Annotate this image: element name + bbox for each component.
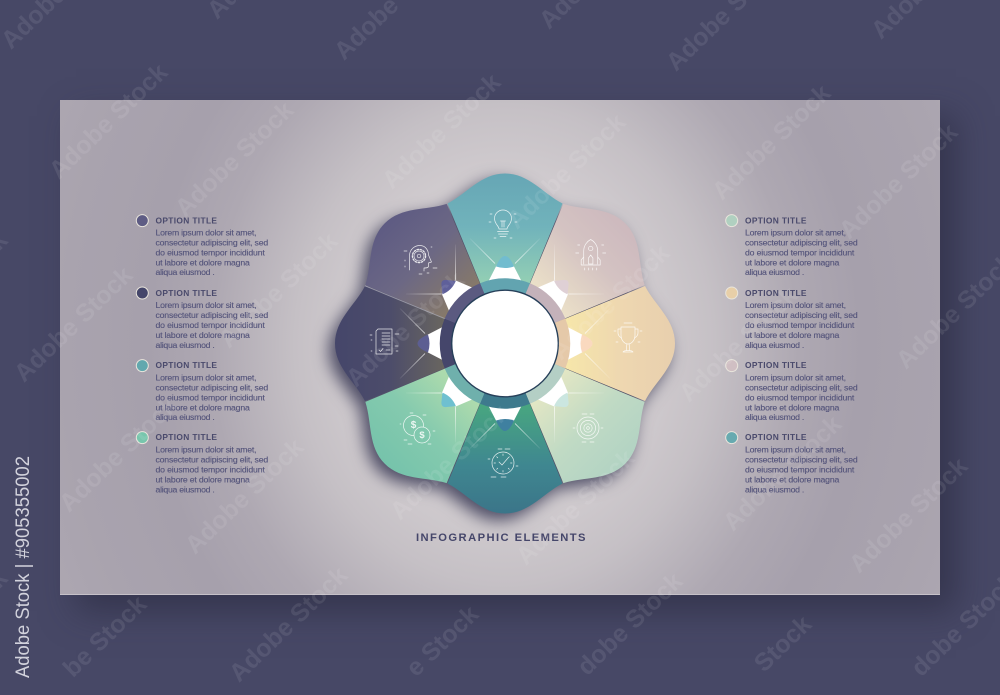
option: left 4: OPTION TITLE	[156, 432, 217, 442]
option: left 3: ut labore et dolore magna	[156, 402, 250, 412]
option: left 2	[136, 287, 268, 350]
option: left 1: Lorem ipsum dolor sit amet,	[156, 227, 256, 237]
option: left 4: consectetur adipiscing elit, sed	[156, 455, 268, 465]
watermark pattern: Stock	[749, 610, 817, 678]
watermark pattern: Adobe Stock	[224, 561, 353, 687]
watermark pattern: Adobe Stock	[707, 79, 836, 205]
option: left 3	[136, 360, 268, 422]
option: right 3: Lorem ipsum dolor sit amet,	[745, 372, 846, 382]
icon: head with gear	[404, 246, 437, 274]
option: right 1: do eiusmod tempor incididunt	[745, 247, 855, 257]
option: right 4: Lorem ipsum dolor sit amet,	[745, 445, 846, 455]
segment: upper left wedge	[344, 183, 546, 384]
option: left 4: aliqua eiusmod .	[156, 485, 215, 495]
segment: lower right wedge	[464, 303, 666, 504]
option: right 2: consectetur adipiscing elit, sed	[745, 310, 858, 320]
title: infographic elements: INFOGRAPHIC ELEMENTS	[416, 532, 586, 544]
option: left 2: Lorem ipsum dolor sit amet,	[156, 300, 256, 310]
spike: upper right	[524, 245, 604, 324]
option: right 2: ut labore et dolore magna	[745, 330, 839, 340]
centre white circle	[452, 290, 558, 397]
spike: lower left	[406, 363, 486, 442]
option: left 4: Lorem ipsum dolor sit amet,	[156, 445, 256, 455]
option: right 4: do eiusmod tempor incididunt	[745, 465, 855, 475]
watermark pattern: Adobe Stock	[9, 261, 138, 387]
option: left 3: do eiusmod tempor incididunt	[156, 392, 265, 402]
option: left 2: OPTION TITLE	[156, 288, 217, 298]
watermark pattern: Adobe Stock	[718, 410, 847, 536]
option: left 3: aliqua eiusmod .	[156, 412, 215, 422]
watermark pattern: be Stock	[58, 590, 152, 683]
segment: top wedge	[448, 174, 562, 344]
option: right 4: consectetur adipiscing elit, sed	[745, 455, 858, 465]
option: right 2: Lorem ipsum dolor sit amet,	[745, 300, 846, 310]
option: left 2: do eiusmod tempor incididunt	[156, 320, 265, 330]
option: right 1: ut labore et dolore magna	[745, 257, 839, 267]
option: right 3: do eiusmod tempor incididunt	[745, 392, 855, 402]
spike: bottom	[470, 406, 540, 448]
watermark pattern: dobe Stock	[572, 567, 688, 681]
option: left 1: do eiusmod tempor incididunt	[156, 247, 265, 257]
coloured ring	[446, 284, 564, 403]
spike: lower right	[524, 363, 604, 442]
option: left 1: aliqua eiusmod .	[156, 267, 215, 277]
watermark pattern: Adobe Stock	[377, 68, 506, 194]
watermark pattern: Adobe Stock	[834, 118, 963, 244]
option: right 2: do eiusmod tempor incididunt	[745, 320, 855, 330]
option: right 1: Lorem ipsum dolor sit amet,	[745, 227, 846, 237]
watermark pattern: Adobe Stock	[844, 452, 973, 578]
white spikes, rays and coloured tips	[400, 238, 610, 448]
option: right 3: aliqua eiusmod .	[745, 412, 804, 422]
option: left 4	[136, 432, 268, 495]
watermark pattern: Adobe Stock	[214, 227, 343, 353]
panel: background card	[60, 100, 940, 595]
icon: coins	[400, 413, 435, 444]
segment: bottom wedge	[448, 344, 562, 514]
option: left 1: consectetur adipiscing elit, sed	[156, 238, 268, 248]
watermark pattern: Adobe Stock	[502, 108, 631, 234]
icon: trophy	[614, 323, 642, 352]
option: right 2: OPTION TITLE	[745, 288, 807, 298]
option: left 2: aliqua eiusmod .	[156, 340, 215, 350]
option: left 2: ut labore et dolore magna	[156, 330, 250, 340]
segment: right wedge	[505, 286, 675, 401]
icon: clock	[488, 449, 518, 477]
option: left 3: OPTION TITLE	[156, 360, 217, 370]
option: right 4	[726, 432, 858, 495]
option: right 3: OPTION TITLE	[745, 360, 807, 370]
spike: top	[470, 238, 540, 282]
option: left 1	[136, 215, 268, 277]
option: left 2: consectetur adipiscing elit, sed	[156, 310, 268, 320]
icon: coins: $	[411, 420, 417, 431]
icon: rocket	[576, 240, 606, 270]
option: left 1: OPTION TITLE	[156, 216, 217, 226]
option: right 4: OPTION TITLE	[745, 432, 807, 442]
icon: target	[573, 414, 603, 442]
watermark pattern: Adobe Stock	[170, 96, 299, 222]
watermark pattern: e Stock	[401, 600, 484, 682]
watermark pattern: Adobe Stock	[44, 58, 173, 184]
watermark pattern: Adobe Stock	[674, 281, 803, 407]
icon: coins: $	[419, 430, 425, 441]
stock id side label: Adobe Stock | #905355002	[12, 456, 34, 678]
option: right 1: consectetur adipiscing elit, sed	[745, 238, 858, 248]
segment: left wedge	[335, 286, 505, 401]
watermark pattern: Adobe Stock	[546, 239, 675, 365]
icon: document	[370, 329, 399, 354]
option: right 2	[726, 287, 858, 350]
watermark pattern: Adobe Stock	[180, 433, 309, 559]
watermark pattern: Adobe Stock	[385, 399, 514, 525]
option: left 3: Lorem ipsum dolor sit amet,	[156, 372, 256, 382]
option: left 1: ut labore et dolore magna	[156, 257, 250, 267]
wheel diagram	[335, 174, 675, 514]
option: right 4: aliqua eiusmod .	[745, 485, 804, 495]
spike: right	[567, 308, 610, 378]
option: right 2: aliqua eiusmod .	[745, 340, 804, 350]
option: left 3: consectetur adipiscing elit, sed	[156, 383, 268, 393]
icon: light bulb	[489, 210, 517, 238]
option: right 1: OPTION TITLE	[745, 216, 807, 226]
watermark pattern: Adobe Stock	[511, 444, 640, 570]
spike: upper left	[406, 245, 486, 324]
option: left 4: ut labore et dolore magna	[156, 475, 250, 485]
option: right 3: consectetur adipiscing elit, sed	[745, 383, 858, 393]
option: right 1	[726, 215, 858, 277]
watermark pattern: Adobe Stock	[341, 266, 470, 392]
segment: lower left wedge	[344, 303, 546, 504]
option: right 3	[726, 360, 858, 422]
watermark pattern: Adobe Stock	[54, 391, 183, 517]
option: right 1: aliqua eiusmod .	[745, 267, 804, 277]
segment: upper right wedge	[464, 183, 666, 384]
wheel segments with shadow	[335, 174, 675, 514]
option: left 4: do eiusmod tempor incididunt	[156, 465, 265, 475]
option: right 3: ut labore et dolore magna	[745, 402, 839, 412]
option: right 4: ut labore et dolore magna	[745, 475, 839, 485]
spike: left	[400, 308, 443, 378]
